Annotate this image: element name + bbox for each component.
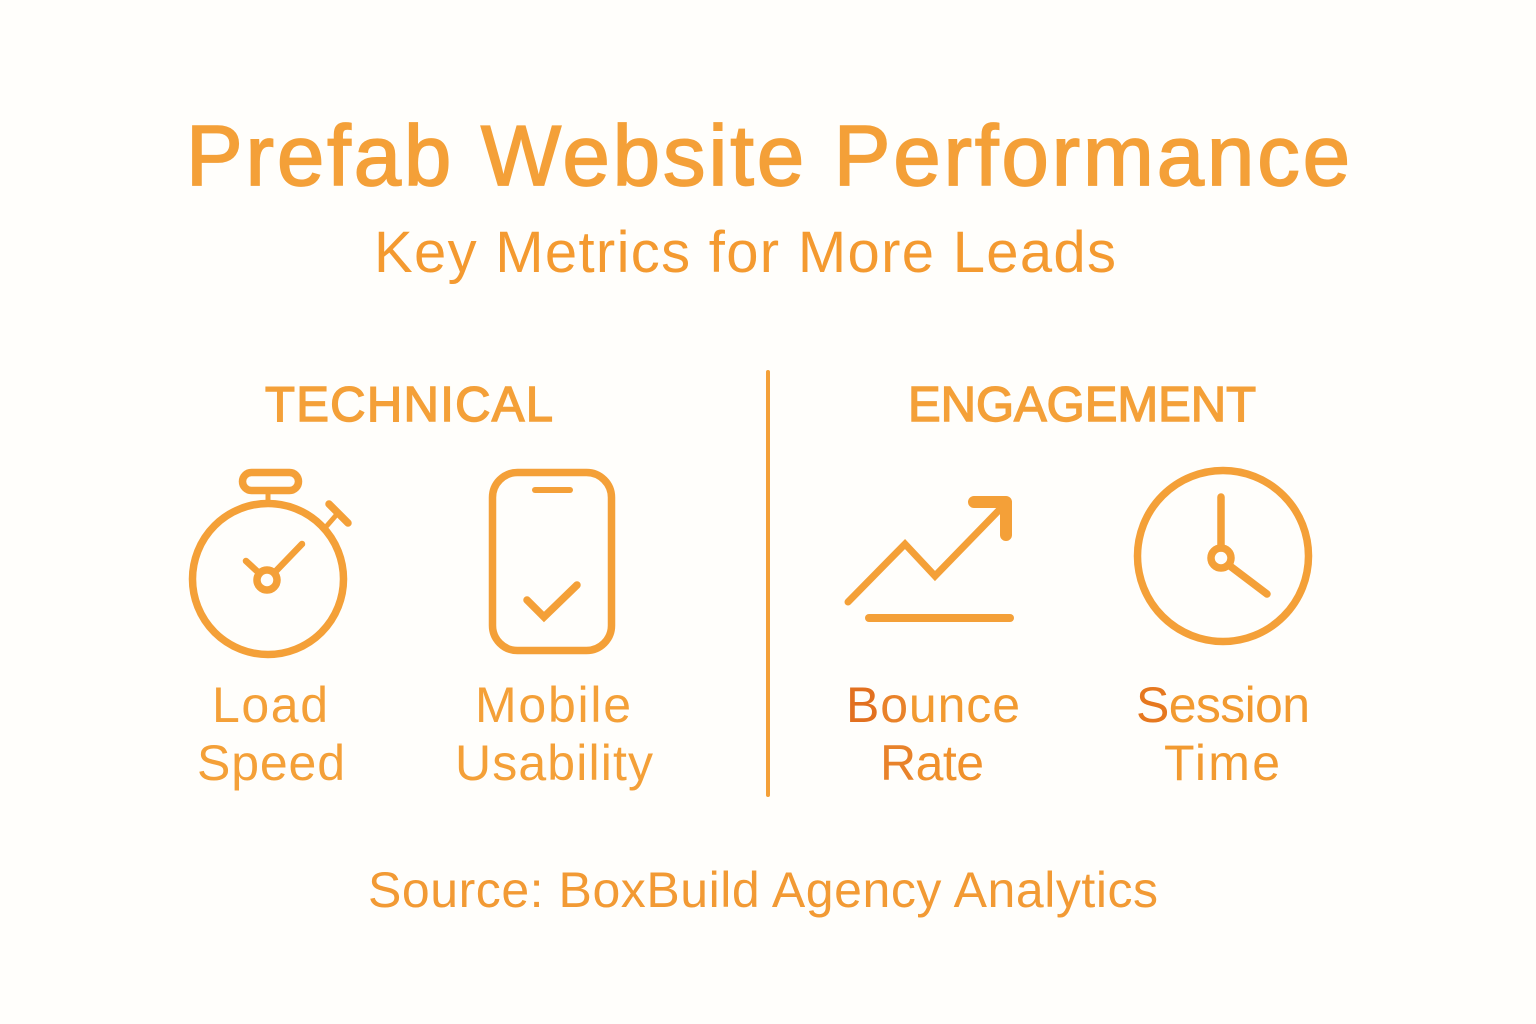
divider	[766, 372, 770, 795]
title: Prefab Website Performance	[186, 109, 1350, 204]
label: bounce rate	[846, 677, 1020, 791]
heading: technical: TECHNICAL	[265, 378, 553, 432]
icon: clock	[1138, 470, 1308, 642]
label: bounce rate: Rate	[880, 735, 984, 791]
label: bounce rate: Bounce	[846, 677, 1020, 733]
label: load speed: Load	[212, 677, 328, 733]
label: session time: Session	[1136, 677, 1310, 733]
label: mobile usability: Usability	[455, 735, 653, 791]
icon: mobile phone with check	[492, 472, 612, 650]
icon: trend arrow	[848, 502, 1010, 618]
source note: Source: BoxBuild Agency Analytics	[368, 862, 1158, 918]
label: session time	[1136, 677, 1310, 791]
label: load speed: Speed	[197, 735, 345, 791]
heading: engagement: ENGAGEMENT	[908, 378, 1256, 432]
label: session time: Time	[1164, 735, 1280, 791]
label: mobile usability	[455, 677, 653, 791]
subtitle: Key Metrics for More Leads	[374, 220, 1116, 285]
label: load speed	[197, 677, 345, 791]
icon: stopwatch	[192, 472, 348, 654]
label: mobile usability: Mobile	[475, 677, 631, 733]
